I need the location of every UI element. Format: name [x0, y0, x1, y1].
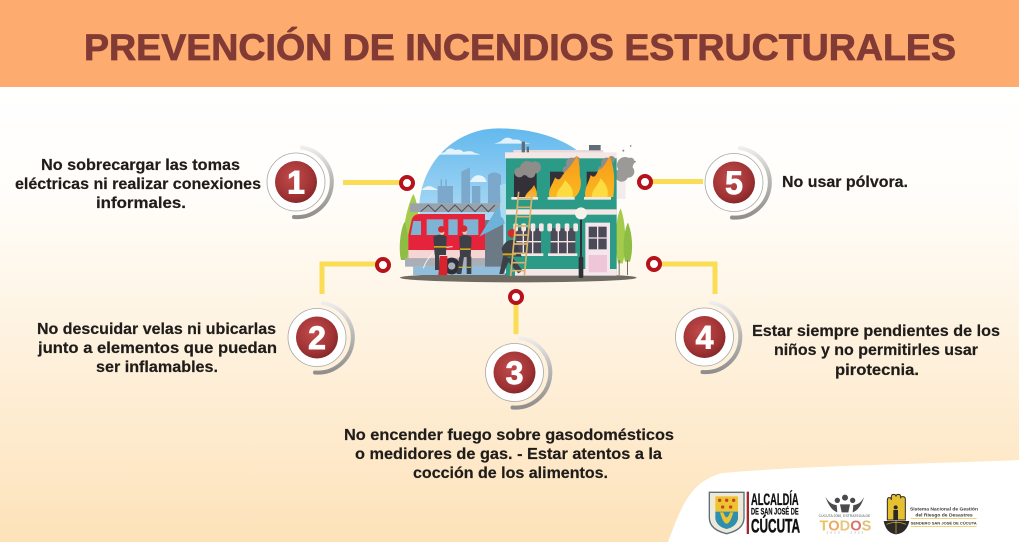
logo: Sistema Nacional text: del Riesgo de Desastres — [915, 513, 973, 518]
logo: Todos — [819, 495, 871, 535]
text block 2 — [37, 321, 277, 376]
logo: Cúcuta coat of arms — [709, 492, 744, 534]
hydrant — [438, 256, 447, 275]
water — [479, 206, 505, 237]
text block 4: Estar siempre pendientes de los — [752, 323, 1000, 340]
text block 3 — [344, 427, 674, 482]
windows upper — [514, 173, 537, 197]
badge 1: 1 — [287, 164, 305, 200]
windows lower — [516, 228, 541, 253]
firefighters — [433, 235, 523, 274]
header band — [0, 0, 1019, 87]
building — [506, 157, 617, 276]
text block 4: pirotecnia. — [835, 362, 919, 379]
text block 2: ser inflamables. — [96, 359, 218, 376]
text block 5: No usar pólvora. — [782, 174, 908, 191]
connector 2 — [322, 259, 389, 294]
illustration: burning building and fire truck — [400, 128, 637, 282]
connector 3 — [510, 291, 522, 334]
text block 1: informales. — [96, 195, 186, 212]
badge 4: 4 — [696, 320, 714, 356]
text block 3: cocción de los alimentos. — [413, 465, 608, 482]
badge 5: 5 — [725, 165, 743, 201]
text block 4 — [752, 323, 1000, 379]
logo: Todos: TODOS — [819, 518, 871, 534]
street lamp — [580, 218, 582, 277]
badge 1 — [267, 148, 332, 217]
flames — [549, 155, 581, 197]
logo: Alcaldía wordmark: ALCALDÍA — [751, 490, 799, 509]
text block 1: eléctricas ni realizar conexiones — [15, 176, 261, 193]
logo: Sistema Nacional text: SENDERO SAN JOSÉ DE CÚCUTA — [911, 520, 977, 525]
badge 2: 2 — [308, 320, 326, 356]
badge 3 — [486, 338, 550, 408]
logo: Todos: CÚCUTA 2050, ESTRATEGIA DE — [819, 513, 871, 518]
trees right — [616, 208, 625, 263]
logo: Sistema Nacional text: Sistema Nacional de Gestión — [910, 507, 978, 512]
logos — [709, 490, 978, 537]
text block 4: niños y no permitirles usar — [774, 342, 978, 359]
door — [585, 223, 610, 275]
smoke — [514, 161, 541, 178]
logo: Sistema Nacional text — [910, 507, 978, 527]
ladder — [511, 192, 532, 276]
text block 1: No sobrecargar las tomas — [41, 157, 240, 174]
logo: Alcaldía wordmark: DE SAN JOSÉ DE — [751, 506, 799, 516]
text block 2: junto a elementos que puedan — [37, 340, 277, 357]
badge 5 — [705, 148, 770, 218]
truck — [413, 267, 505, 275]
connector 5 — [639, 176, 703, 188]
connector 1 — [343, 177, 413, 189]
logo: Todos: 2020 - 2023 — [827, 531, 864, 535]
text block 2: No descuidar velas ni ubicarlas — [37, 321, 276, 338]
logo: Alcaldía wordmark: CÚCUTA — [751, 513, 800, 537]
logo: Alcaldía wordmark — [747, 490, 800, 537]
connector 4 — [648, 258, 715, 294]
text block 3: o medidores de gas. - Estar atentos a la — [355, 446, 662, 463]
trees left — [403, 194, 419, 260]
badge 4 — [676, 302, 740, 372]
title: PREVENCIÓN DE INCENDIOS ESTRUCTURALES — [84, 26, 956, 68]
text block 3: No encender fuego sobre gasodomésticos — [344, 427, 674, 444]
smoke right and balcony — [617, 182, 626, 199]
badge 3: 3 — [506, 355, 523, 391]
badge 2 — [288, 303, 353, 373]
footer panel — [668, 460, 1019, 542]
logo: gestión del riesgo hand — [884, 494, 909, 534]
text block 1 — [15, 157, 261, 212]
